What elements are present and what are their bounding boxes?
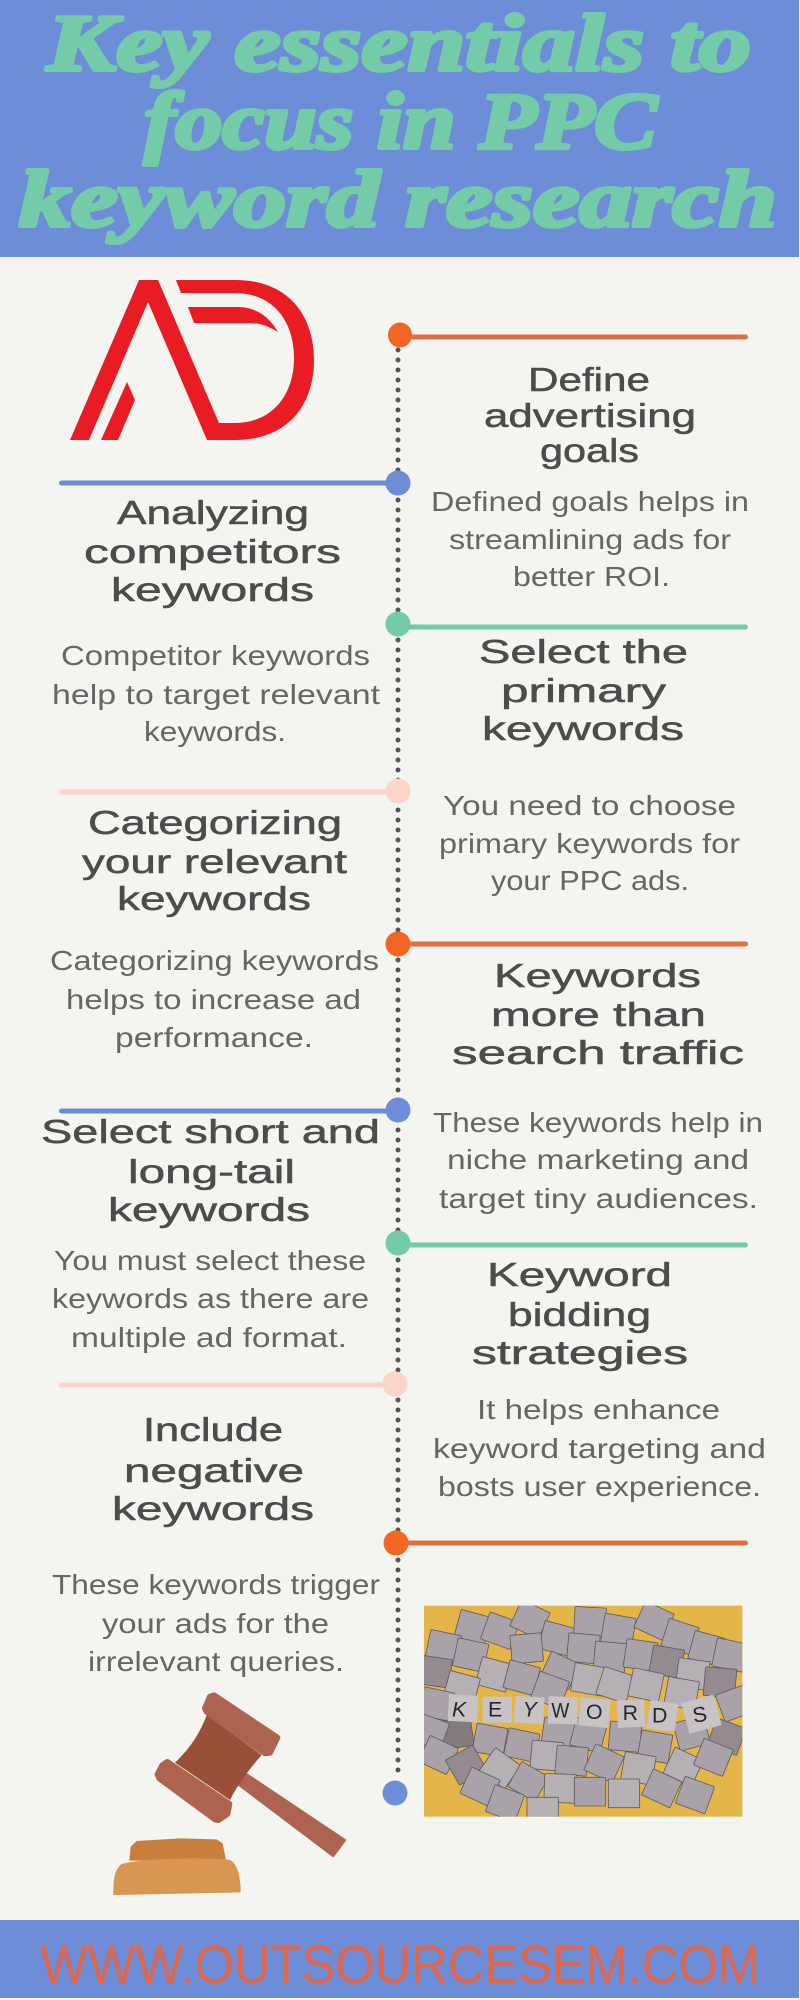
connector: blue end node [382, 1780, 408, 1806]
panel: analyzing competitors keywords: Competitor keywords [61, 640, 370, 671]
panel: keyword bidding strategies: bidding [508, 1296, 651, 1333]
panel: select short and long-tail keywords: multiple ad format. [71, 1322, 347, 1353]
panel: define advertising goals: Define [528, 361, 650, 398]
tile word: KEYWORDS [448, 1694, 722, 1734]
panel: keyword bidding strategies: strategies [472, 1334, 688, 1371]
panel: keywords more than search traffic: niche marketing and [447, 1144, 749, 1175]
timeline dotted line [396, 350, 400, 1780]
tile word: KEYWORDS: Y [523, 1698, 539, 1722]
panel: keyword bidding strategies [433, 1256, 766, 1502]
tile word: KEYWORDS: R [623, 1701, 638, 1725]
panel: include negative keywords: Include [143, 1411, 283, 1448]
panel: categorizing your relevant keywords [50, 804, 379, 1053]
tile word: KEYWORDS: O [586, 1700, 603, 1724]
panel: select short and long-tail keywords: long-tail [128, 1153, 295, 1190]
panel: include negative keywords: keywords [112, 1490, 314, 1527]
panel: keywords more than search traffic: These keywords help in [433, 1107, 763, 1138]
panel: include negative keywords: your ads for the [102, 1608, 329, 1639]
panel: select the primary keywords: primary keywords for [439, 828, 740, 859]
panel: include negative keywords: negative [124, 1452, 304, 1489]
panel: categorizing your relevant keywords: keywords [117, 880, 311, 917]
connector: orange node 1 [388, 322, 748, 348]
panel: categorizing your relevant keywords: your relevant [82, 843, 347, 880]
photo: keyword scrabble tiles [424, 1606, 742, 1817]
panel: keyword bidding strategies: It helps enhance [477, 1394, 720, 1425]
panel: select the primary keywords [439, 633, 740, 896]
panel: categorizing your relevant keywords: helps to increase ad [66, 984, 361, 1015]
panel: keywords more than search traffic: search traffic [452, 1034, 744, 1071]
panel: keyword bidding strategies: Keyword [487, 1256, 672, 1293]
panel: select the primary keywords: primary [501, 672, 667, 709]
tile word: KEYWORDS: E [488, 1698, 502, 1722]
connector: pink node 1 [59, 778, 410, 804]
connector: blue node 1 [59, 470, 410, 496]
panel: analyzing competitors keywords: Analyzing [117, 494, 309, 531]
logo: AD [70, 280, 314, 440]
panel: define advertising goals: better ROI. [513, 561, 670, 592]
panel: analyzing competitors keywords: keywords [111, 571, 314, 608]
panel: include negative keywords [52, 1411, 380, 1677]
panel: select the primary keywords: your PPC ads. [491, 865, 689, 896]
panel: select short and long-tail keywords [41, 1113, 380, 1353]
title banner: Key essentials to [46, 0, 751, 88]
title banner: focus in PPC [144, 76, 658, 166]
panel: analyzing competitors keywords: keywords. [144, 716, 286, 747]
panel: select the primary keywords: You need to choose [443, 790, 736, 821]
panel: categorizing your relevant keywords: Categorizing keywords [50, 945, 379, 976]
panel: select the primary keywords: Select the [479, 633, 688, 670]
panel: analyzing competitors keywords: help to target relevant [52, 679, 380, 710]
panel: keyword bidding strategies: keyword targeting and [433, 1433, 766, 1464]
title banner [0, 0, 799, 257]
panel: select short and long-tail keywords: keywords as there are [52, 1283, 369, 1314]
tile word: KEYWORDS: W [551, 1698, 570, 1722]
panel: select short and long-tail keywords: You must select these [54, 1245, 366, 1276]
panel: categorizing your relevant keywords: Categorizing [88, 804, 342, 841]
panel: include negative keywords: These keywords trigger [52, 1569, 380, 1600]
panel: analyzing competitors keywords: competitors [84, 533, 341, 570]
panel: select short and long-tail keywords: Select short and [41, 1113, 380, 1150]
panel: keyword bidding strategies: bosts user experience. [438, 1471, 761, 1502]
tile word: KEYWORDS: K [452, 1698, 467, 1722]
tile word: KEYWORDS: D [652, 1703, 667, 1727]
panel: define advertising goals: goals [540, 432, 639, 469]
panel: categorizing your relevant keywords: performance. [115, 1022, 313, 1053]
panel: keywords more than search traffic: target tiny audiences. [439, 1183, 758, 1214]
connector: blue node 2 [59, 1098, 410, 1122]
connector: green node 2 [386, 1230, 748, 1256]
connector: orange node 2 [386, 932, 748, 956]
panel: select short and long-tail keywords: keywords [108, 1191, 310, 1228]
footer banner with website URL: WWW.OUTSOURCESEM.COM [40, 1935, 760, 1995]
connector: green node 1 [386, 612, 748, 636]
panel: keywords more than search traffic [433, 957, 763, 1214]
tile word: KEYWORDS: S [691, 1702, 709, 1728]
connector: orange node 3 [384, 1530, 748, 1556]
connector: pink node 2 [59, 1372, 408, 1396]
panel: include negative keywords: irrelevant queries. [88, 1646, 344, 1677]
panel: define advertising goals: Defined goals helps in [431, 486, 749, 517]
panel: keywords more than search traffic: more than [491, 996, 706, 1033]
panel: define advertising goals: advertising [484, 397, 696, 434]
panel: keywords more than search traffic: Keywords [494, 957, 701, 994]
panel: define advertising goals: streamlining ads for [449, 524, 731, 555]
panel: analyzing competitors keywords [52, 494, 380, 747]
panel: select the primary keywords: keywords [482, 710, 684, 747]
panel: define advertising goals [431, 361, 749, 592]
icon: gavel [113, 1695, 346, 1895]
title banner: keyword research [19, 154, 777, 244]
